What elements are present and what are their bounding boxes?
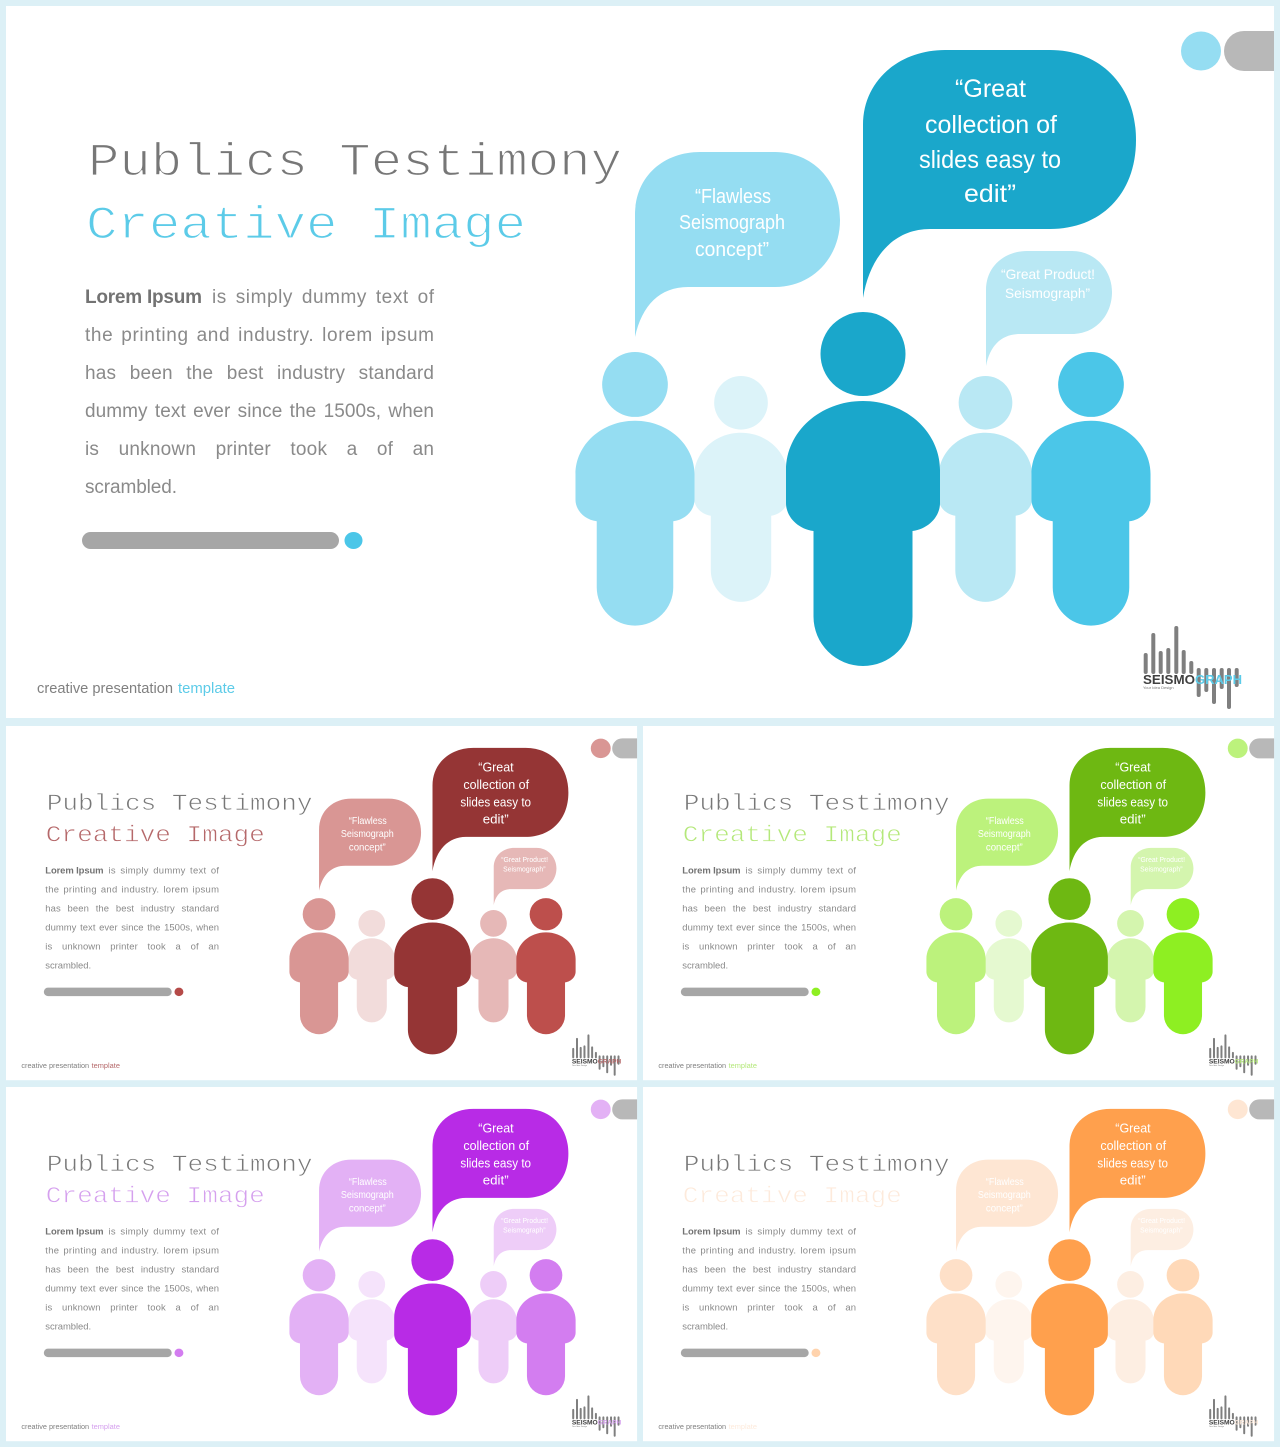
speech bubble: great product: Seismograph”: [1005, 285, 1090, 301]
speech bubble: great product: “Great Product!: [1001, 266, 1095, 282]
top right circle: [1228, 1100, 1248, 1119]
speech bubble: flawless: concept”: [986, 1203, 1023, 1214]
speech bubble: flawless: “Flawless: [986, 816, 1024, 827]
accent dot: [174, 1349, 183, 1357]
footer: template: [92, 1422, 120, 1431]
speech bubble: great collection: “Great: [478, 760, 514, 774]
speech bubble: great collection: edit”: [1120, 812, 1146, 826]
speech bubble: flawless: Seismograph: [341, 829, 394, 840]
speech bubble: great collection: edit”: [964, 180, 1016, 208]
text block: description: [45, 866, 219, 971]
footer: [37, 681, 235, 697]
speech bubble: great product: [1131, 848, 1193, 905]
text block: description: scrambled.: [85, 477, 177, 498]
speech bubble: great collection: slides easy to: [460, 796, 531, 810]
speech bubble: flawless: concept”: [986, 842, 1023, 853]
footer: template: [178, 681, 235, 697]
text block: description: the printing and industry. lorem ipsum: [682, 885, 856, 896]
speech bubble: great collection: [1070, 1109, 1205, 1232]
speech bubble: flawless: [319, 1160, 421, 1252]
text block: description: Lorem Ipsum: [85, 287, 202, 308]
person: pale: [985, 1271, 1032, 1383]
speech bubble: flawless: Seismograph: [679, 212, 785, 234]
speech bubble: flawless: Seismograph: [978, 1190, 1031, 1201]
progress bar: [44, 988, 172, 996]
top right circle: [1228, 739, 1248, 758]
text block: description: has been the best industry standard: [682, 904, 856, 915]
logo: [1143, 628, 1242, 707]
person: left: [926, 898, 986, 1034]
person: pale: [985, 910, 1032, 1022]
speech bubble: flawless: concept”: [695, 239, 769, 261]
logo: SEISMO: [572, 1058, 598, 1065]
speech bubble: great collection: [433, 748, 568, 871]
top right pill: [1249, 738, 1274, 758]
text block: description: dummy text ever since the 1500s, when: [682, 1283, 856, 1294]
accent dot: [344, 532, 362, 549]
person: pale: [348, 1271, 395, 1383]
text block: description: scrambled.: [682, 960, 728, 971]
text block: description: dummy text ever since the 1500s, when: [45, 1283, 219, 1294]
person: centre: [1031, 878, 1108, 1054]
person: pale: [348, 910, 395, 1022]
text block: description: Lorem Ipsum: [682, 866, 741, 877]
panel: green slide: [643, 726, 1274, 1080]
text block: description: is simply dummy text of: [212, 287, 435, 308]
text block: description: the printing and industry. lorem ipsum: [682, 1246, 856, 1257]
text block: description: the printing and industry. lorem ipsum: [45, 885, 219, 896]
footer: creative presentation: [658, 1061, 726, 1070]
logo: [572, 1035, 621, 1075]
speech bubble: great collection: [1070, 748, 1205, 871]
top right pill: [612, 738, 637, 758]
text block: description: Lorem Ipsum: [45, 1227, 104, 1238]
footer: [21, 1061, 120, 1070]
footer: creative presentation: [658, 1422, 726, 1431]
top right pill: [1224, 31, 1274, 71]
footer: [658, 1061, 757, 1070]
person: centre: [1031, 1239, 1108, 1415]
top right circle: [591, 1100, 611, 1119]
logo: [572, 1396, 621, 1436]
text block: description: has been the best industry standard: [45, 1265, 219, 1276]
speech bubble: great product: Seismograph”: [1140, 1227, 1183, 1234]
text block: description: has been the best industry standard: [45, 904, 219, 915]
top right circle: [1181, 32, 1221, 70]
logo: Your Idea Design: [572, 1425, 587, 1428]
text block: description: [45, 1227, 219, 1332]
progress bar: [44, 1349, 172, 1357]
person: pale: [694, 376, 788, 602]
progress bar: [82, 532, 339, 549]
text block: description: Lorem Ipsum: [682, 1227, 741, 1238]
speech bubble: great product: [494, 848, 556, 905]
person: right: [1031, 352, 1151, 626]
panel: main blue slide: [6, 6, 1274, 718]
speech bubble: great product: Seismograph”: [503, 866, 546, 873]
subtitle: Creative Image: [46, 1183, 265, 1209]
accent dot: [811, 1349, 820, 1357]
title: Publics Testimony: [88, 137, 622, 189]
person: left: [575, 352, 695, 626]
person: light: [939, 376, 1032, 602]
speech bubble: great collection: [433, 1109, 568, 1232]
speech bubble: great collection: slides easy to: [1097, 796, 1168, 810]
speech bubble: flawless: concept”: [349, 1203, 386, 1214]
speech bubble: great collection: collection of: [925, 111, 1057, 139]
person: left: [289, 898, 349, 1034]
logo: GRAPH: [1235, 1419, 1258, 1426]
text block: description: scrambled.: [45, 960, 91, 971]
title: Publics Testimony: [47, 791, 313, 817]
speech bubble: great collection: collection of: [463, 1139, 530, 1153]
title: Publics Testimony: [47, 1152, 313, 1178]
logo: Your Idea Design: [1143, 685, 1174, 690]
speech bubble: great collection: collection of: [1100, 778, 1167, 792]
logo: [1209, 1035, 1258, 1075]
text block: description: is unknown printer took a of an: [85, 439, 434, 460]
speech bubble: flawless: concept”: [349, 842, 386, 853]
speech bubble: great product: “Great Product!: [1138, 1218, 1185, 1225]
panel: orange slide: [643, 1087, 1274, 1441]
top right pill: [1249, 1099, 1274, 1119]
speech bubble: great collection: “Great: [955, 75, 1026, 103]
text block: description: Lorem Ipsum: [45, 866, 104, 877]
speech bubble: great product: [1131, 1209, 1193, 1266]
panel: red slide: [6, 726, 637, 1080]
text block: description: scrambled.: [682, 1321, 728, 1332]
title: Publics Testimony: [684, 791, 950, 817]
top right circle: [591, 739, 611, 758]
speech bubble: great collection: slides easy to: [460, 1157, 531, 1171]
person: centre: [786, 312, 940, 666]
footer: template: [92, 1061, 120, 1070]
text block: description: is simply dummy text of: [109, 866, 219, 877]
text block: description: is simply dummy text of: [109, 1227, 219, 1238]
speech bubble: great product: [986, 251, 1112, 366]
text block: description: the printing and industry. lorem ipsum: [85, 325, 434, 346]
text block: description: is unknown printer took a of an: [682, 1302, 856, 1313]
speech bubble: flawless: “Flawless: [349, 1177, 387, 1188]
text block: description: scrambled.: [45, 1321, 91, 1332]
logo: Your Idea Design: [1209, 1064, 1224, 1067]
text block: description: [85, 287, 435, 498]
person: right: [516, 1259, 576, 1395]
speech bubble: great collection: “Great: [1115, 1121, 1151, 1135]
speech bubble: great collection: slides easy to: [919, 146, 1061, 174]
speech bubble: great product: “Great Product!: [501, 1218, 548, 1225]
text block: description: is simply dummy text of: [746, 866, 856, 877]
text block: description: dummy text ever since the 1500s, when: [682, 922, 856, 933]
logo: GRAPH: [598, 1058, 621, 1065]
person: light: [470, 910, 517, 1022]
logo: SEISMO: [1143, 672, 1195, 687]
speech bubble: flawless: “Flawless: [986, 1177, 1024, 1188]
logo: GRAPH: [1235, 1058, 1258, 1065]
footer: template: [729, 1422, 757, 1431]
person: left: [926, 1259, 986, 1395]
logo: SEISMO: [1209, 1419, 1235, 1426]
speech bubble: great collection: “Great: [1115, 760, 1151, 774]
accent dot: [174, 988, 183, 996]
person: right: [1153, 898, 1213, 1034]
speech bubble: great collection: edit”: [483, 1173, 509, 1187]
logo: [1209, 1396, 1258, 1436]
speech bubble: great product: “Great Product!: [501, 857, 548, 864]
text block: description: is unknown printer took a of an: [45, 1302, 219, 1313]
progress bar: [681, 988, 809, 996]
person: centre: [394, 1239, 471, 1415]
text block: description: dummy text ever since the 1500s, when: [85, 401, 434, 422]
panel: purple slide: [6, 1087, 637, 1441]
logo: SEISMO: [572, 1419, 598, 1426]
text block: description: [682, 1227, 856, 1332]
speech bubble: great product: “Great Product!: [1138, 857, 1185, 864]
speech bubble: great collection: [863, 50, 1136, 298]
speech bubble: flawless: Seismograph: [978, 829, 1031, 840]
text block: description: has been the best industry standard: [85, 363, 434, 384]
text block: description: is unknown printer took a of an: [682, 941, 856, 952]
speech bubble: flawless: [956, 799, 1058, 891]
logo: Your Idea Design: [1209, 1425, 1224, 1428]
speech bubble: great collection: collection of: [463, 778, 530, 792]
speech bubble: great collection: edit”: [1120, 1173, 1146, 1187]
text block: description: has been the best industry standard: [682, 1265, 856, 1276]
footer: creative presentation: [21, 1061, 89, 1070]
speech bubble: flawless: “Flawless: [695, 186, 771, 208]
speech bubble: great collection: slides easy to: [1097, 1157, 1168, 1171]
person: left: [289, 1259, 349, 1395]
text block: description: is simply dummy text of: [746, 1227, 856, 1238]
person: right: [1153, 1259, 1213, 1395]
subtitle: Creative Image: [46, 822, 265, 848]
accent dot: [811, 988, 820, 996]
footer: [21, 1422, 120, 1431]
text block: description: the printing and industry. lorem ipsum: [45, 1246, 219, 1257]
speech bubble: flawless: “Flawless: [349, 816, 387, 827]
text block: description: is unknown printer took a of an: [45, 941, 219, 952]
speech bubble: flawless: [956, 1160, 1058, 1252]
subtitle: Creative Image: [683, 822, 902, 848]
speech bubble: great product: Seismograph”: [1140, 866, 1183, 873]
speech bubble: flawless: [635, 152, 840, 337]
speech bubble: great collection: collection of: [1100, 1139, 1167, 1153]
footer: [658, 1422, 757, 1431]
title: Publics Testimony: [684, 1152, 950, 1178]
subtitle: Creative Image: [86, 200, 526, 252]
person: right: [516, 898, 576, 1034]
logo: SEISMO: [1209, 1058, 1235, 1065]
speech bubble: great collection: edit”: [483, 812, 509, 826]
logo: GRAPH: [1195, 672, 1242, 687]
text block: description: [682, 866, 856, 971]
footer: creative presentation: [37, 681, 173, 697]
speech bubble: great collection: “Great: [478, 1121, 514, 1135]
footer: creative presentation: [21, 1422, 89, 1431]
speech bubble: great product: Seismograph”: [503, 1227, 546, 1234]
text block: description: dummy text ever since the 1500s, when: [45, 922, 219, 933]
top right pill: [612, 1099, 637, 1119]
speech bubble: flawless: Seismograph: [341, 1190, 394, 1201]
person: light: [1107, 1271, 1154, 1383]
person: light: [1107, 910, 1154, 1022]
subtitle: Creative Image: [683, 1183, 902, 1209]
logo: GRAPH: [598, 1419, 621, 1426]
person: centre: [394, 878, 471, 1054]
progress bar: [681, 1349, 809, 1357]
footer: template: [729, 1061, 757, 1070]
logo: Your Idea Design: [572, 1064, 587, 1067]
person: light: [470, 1271, 517, 1383]
speech bubble: flawless: [319, 799, 421, 891]
speech bubble: great product: [494, 1209, 556, 1266]
